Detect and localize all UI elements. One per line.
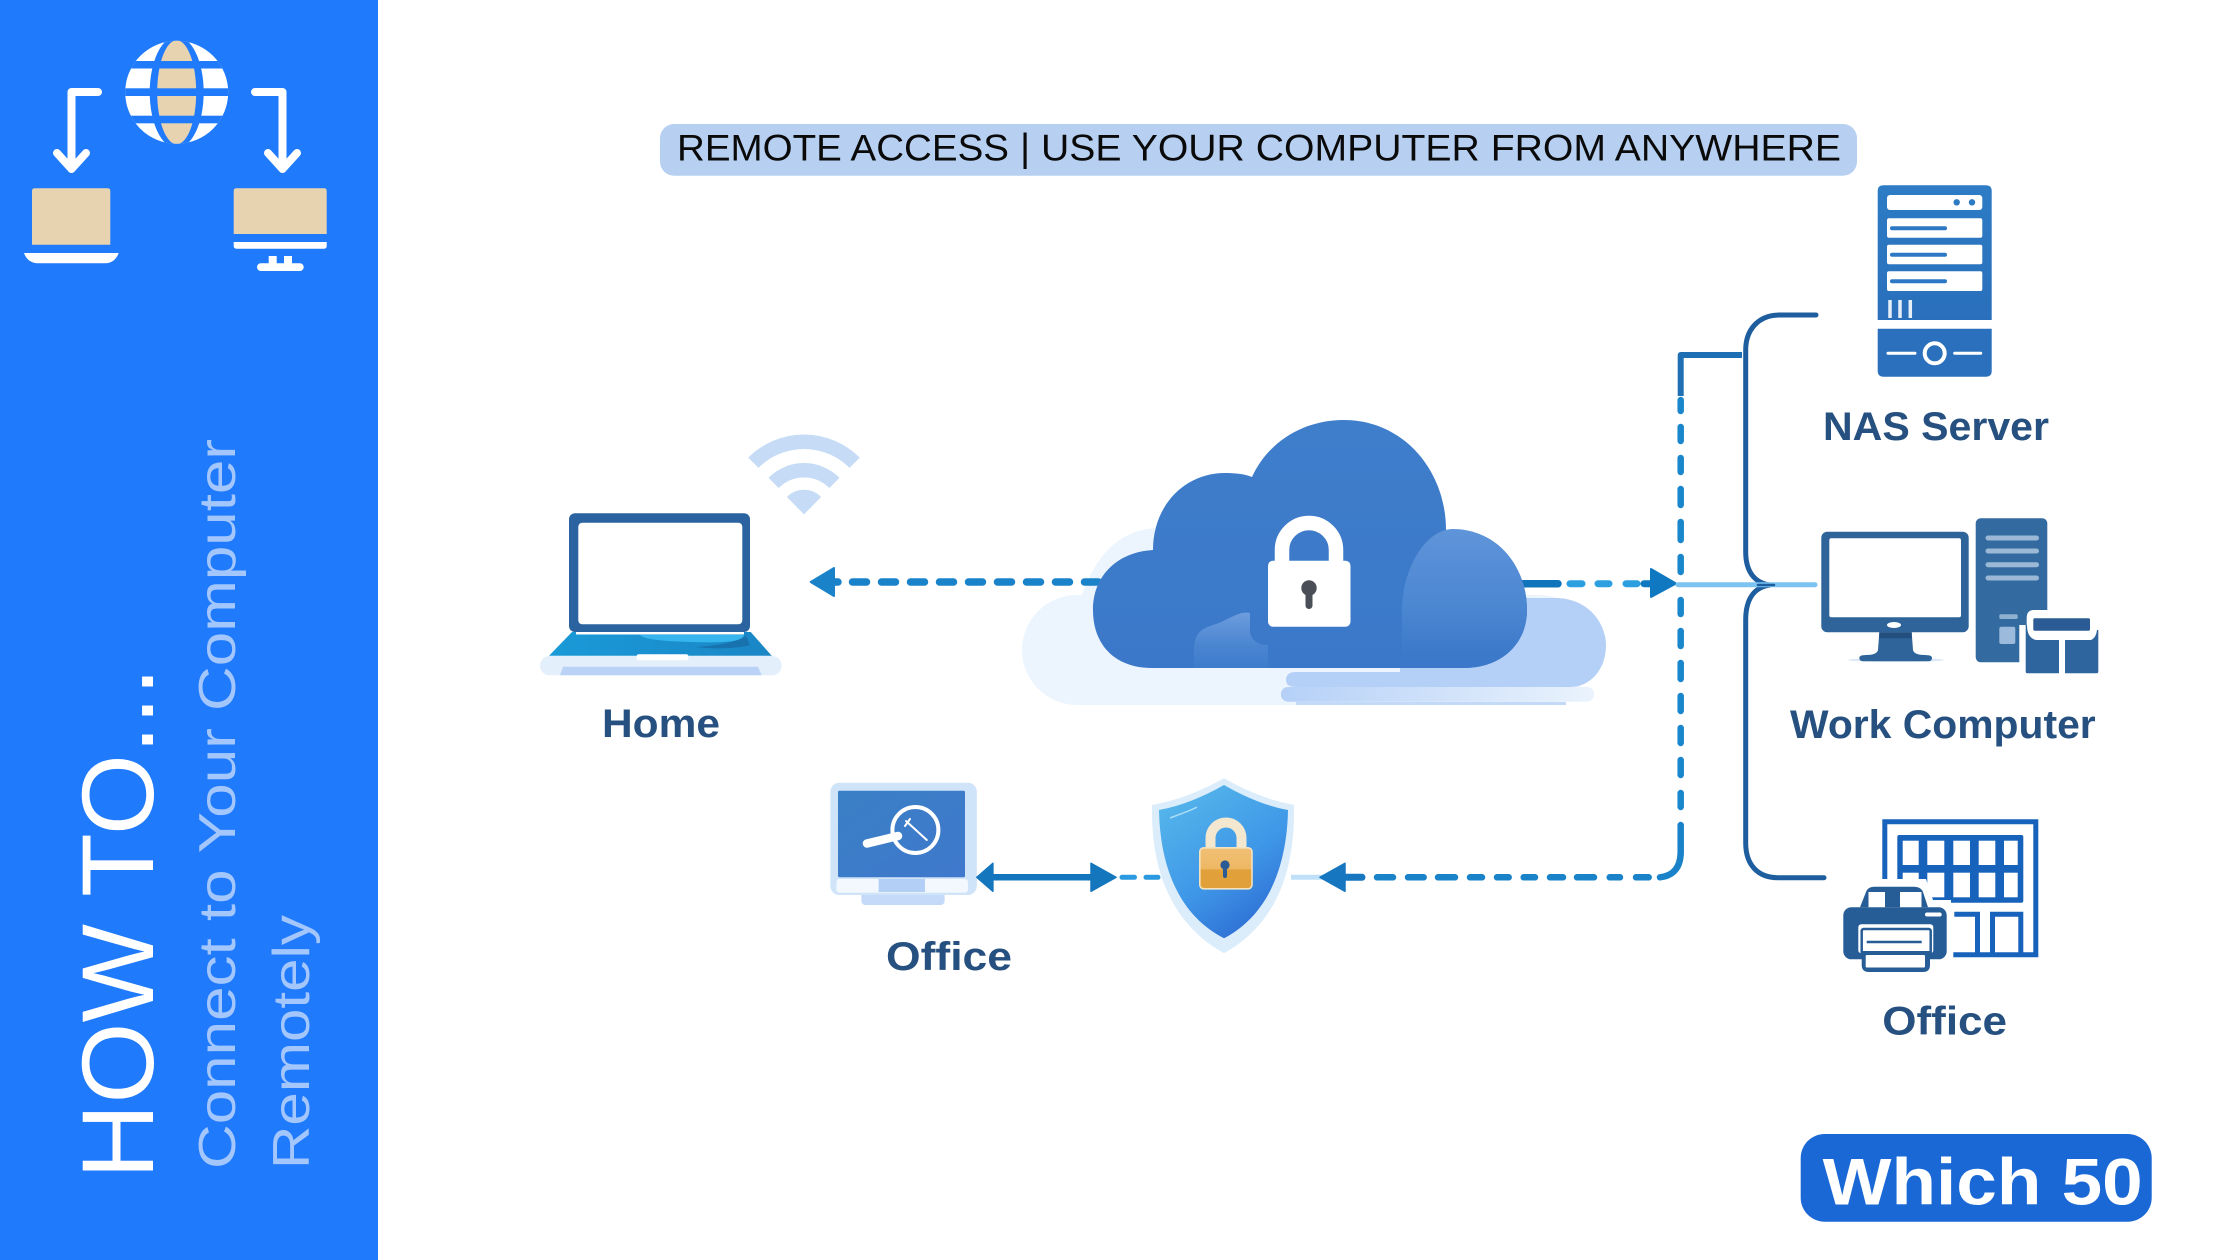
icon: printer [1843,887,1947,972]
subheading: line one: Connect to Your Computer [189,439,247,1169]
icon: NAS server [1878,185,1992,377]
icon: background cloud [1022,528,1606,705]
heading: how to: HOW TO... [61,667,175,1179]
icon: security shield [1152,778,1294,953]
label: work computer: Work Computer [1790,703,2096,747]
badge: Which 50: Which 50 [1823,1144,2143,1218]
arrow: cloud to right side [1520,569,1676,597]
arrow: cloud to home [811,568,1100,596]
title banner: REMOTE ACCESS [677,127,1009,169]
panel: left sidebar [0,0,378,1260]
icon: small monitor [234,188,327,271]
title banner: USE YOUR COMPUTER FROM ANYWHERE [1041,127,1841,169]
icon: office monitor [830,783,977,905]
arrow: globe to monitor [255,92,297,169]
label: office right: Office [1882,999,2007,1043]
icon: globe [125,40,228,144]
arrow: globe to laptop [57,92,98,169]
badge: Which 50 [1801,1134,2152,1222]
icon: office building and printer [1843,822,2036,972]
icon: padlock [1268,523,1350,627]
connector: right bracket [1678,315,1824,878]
icon: work computer [1821,518,2099,680]
arrow: line to shield [1291,863,1362,891]
connector: vertical dashed line [1377,355,1742,877]
title banner [660,124,1857,176]
icon: orange padlock [1200,822,1252,889]
subheading: line two: Remotely [263,915,321,1169]
label: home: Home [602,702,720,746]
icon: cloud with padlock [1093,420,1527,668]
title banner: | [1020,127,1030,170]
arrow: office double arrow [977,863,1158,891]
icon: small laptop [24,188,119,263]
label: office left: Office [886,935,1012,979]
icon: wifi signal [753,442,855,513]
label: NAS server: NAS Server [1823,405,2049,449]
icon: home laptop [540,442,855,675]
